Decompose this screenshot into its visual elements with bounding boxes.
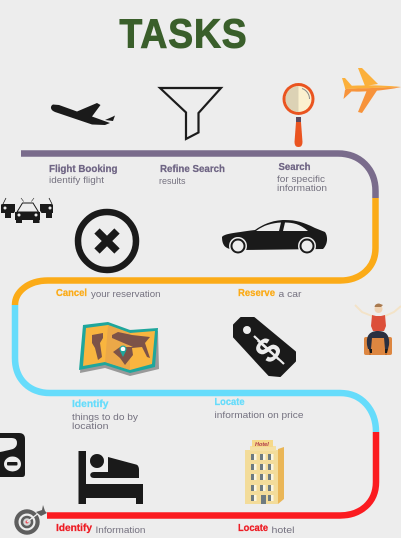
icon: price tag: $ <box>247 330 289 371</box>
label: Reserve <box>238 288 302 300</box>
label: Locate price <box>214 397 304 421</box>
icon: cancel circle <box>78 212 136 270</box>
label: Identify things: things to do by <box>72 412 138 423</box>
icon: door hanger <box>0 433 25 477</box>
label: Locate hotel <box>238 523 294 536</box>
label: Identify things: Identify <box>72 399 109 410</box>
title: TASKS <box>120 10 248 56</box>
label: Identify information: Identify <box>56 523 92 534</box>
label: Refine Search: Refine Search <box>160 164 225 175</box>
path: red segment <box>47 432 376 516</box>
label: Identify information <box>56 523 146 536</box>
label: Refine Search <box>159 164 225 187</box>
label: Flight Booking <box>49 164 118 186</box>
icon: three cars <box>1 198 53 223</box>
label: Identify information: Information <box>96 525 146 536</box>
path: orange segment <box>15 198 376 305</box>
label: Refine Search: results <box>159 176 186 187</box>
icon: orange plane <box>342 68 401 113</box>
icon: bed <box>78 451 143 504</box>
path: purple segment <box>21 154 376 198</box>
label: Search: for specific <box>277 174 325 185</box>
icon: hotel building <box>245 440 284 504</box>
label: Search <box>277 162 327 194</box>
path: blue segment <box>15 305 376 432</box>
label: Identify things <box>72 399 138 432</box>
icon: hotel building: Hotel <box>255 442 269 448</box>
label: Locate price: Locate <box>214 397 245 408</box>
icon: map <box>79 322 159 376</box>
label: Cancel <box>56 288 160 300</box>
label: Locate hotel: hotel <box>272 525 294 536</box>
icon: funnel <box>160 88 221 139</box>
label: Cancel: Cancel <box>56 288 87 299</box>
icon: magnifying glass <box>282 83 314 147</box>
label: Reserve: Reserve <box>238 288 275 299</box>
icon: person on suitcase <box>355 304 401 355</box>
icon: black car <box>222 220 327 255</box>
label: Flight Booking: identify flight <box>49 175 104 186</box>
label: Reserve: a car <box>278 289 302 300</box>
label: Locate price: information on price <box>214 410 304 421</box>
icon: black plane <box>51 103 115 125</box>
label: Flight Booking: Flight Booking <box>49 164 118 175</box>
label: Search: Search <box>278 162 310 173</box>
label: Cancel: your reservation <box>91 289 160 300</box>
label: Identify things: location <box>72 421 108 432</box>
label: Locate hotel: Locate <box>238 523 268 534</box>
label: Search: information <box>277 183 327 194</box>
icon: price tag <box>234 318 295 376</box>
icon: dart target <box>14 505 47 535</box>
